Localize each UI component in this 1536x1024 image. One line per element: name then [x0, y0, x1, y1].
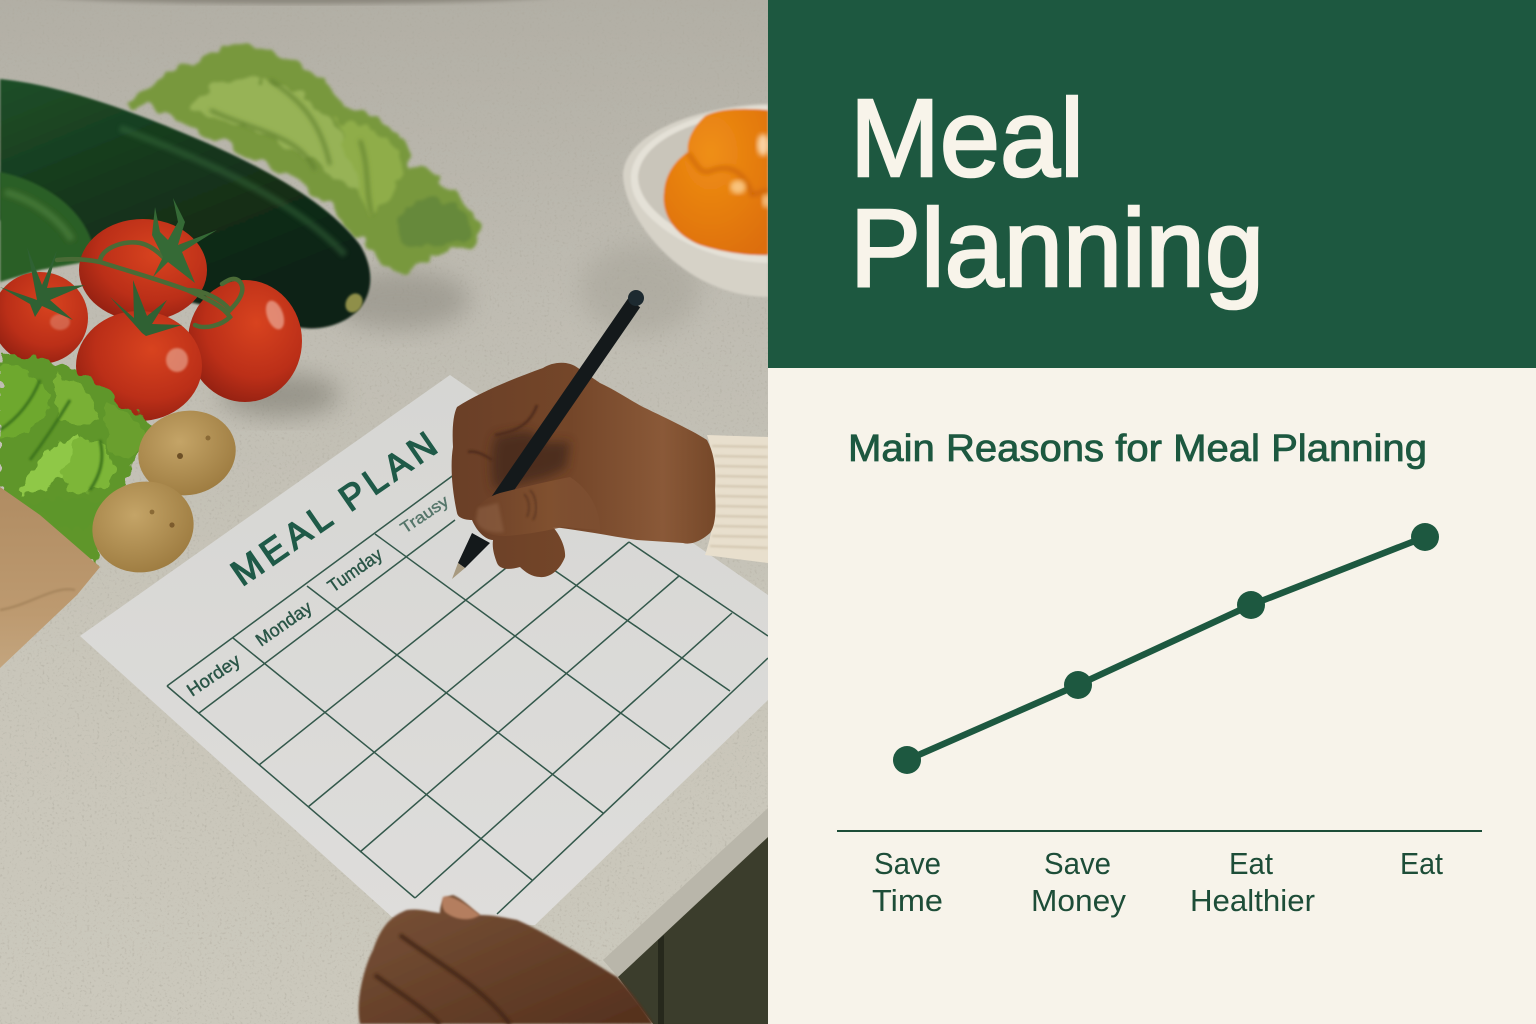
thumb — [473, 477, 600, 536]
day labels: Trausy — [398, 493, 452, 537]
potatoes — [82, 402, 244, 584]
panel: kitchen counter photo illustration — [0, 0, 768, 1024]
panel: text and chart overlay — [837, 77, 1482, 918]
bowl of orange peppers — [623, 104, 770, 297]
axis labels: Eat — [1229, 846, 1273, 881]
panel: green title header — [768, 0, 1536, 368]
axis labels: Time — [872, 883, 943, 918]
axis labels: Healthier — [1190, 883, 1315, 918]
day labels: Monday — [252, 597, 316, 650]
axis labels: Eat — [1400, 846, 1443, 881]
shadow pocket between fingers — [491, 431, 570, 490]
calendar grid — [167, 474, 768, 914]
title: Meal — [850, 77, 1084, 200]
front lettuce — [0, 352, 150, 567]
title: Planning — [850, 187, 1264, 310]
tomato calyx two — [110, 280, 182, 336]
counter front edge and cabinet — [603, 808, 768, 1024]
index finger crease — [468, 405, 537, 460]
vine stems — [57, 242, 242, 327]
day labels: Hordey — [183, 650, 244, 700]
sheet title: MEAL PLAN — [223, 424, 444, 594]
chart axis — [837, 830, 1482, 832]
meal plan sheet — [80, 375, 768, 925]
tomatoes on the vine — [0, 198, 302, 421]
large cucumber — [0, 79, 370, 328]
countertop surface — [0, 0, 768, 1024]
paper bag — [0, 487, 100, 668]
lower hand holding sheet — [359, 895, 653, 1024]
title — [850, 77, 1264, 310]
small cucumber — [0, 172, 92, 282]
chart heading: Main Reasons for Meal Planning — [848, 428, 1427, 470]
line chart — [893, 523, 1439, 774]
panel: cream chart section — [768, 368, 1536, 1024]
writing hand — [452, 363, 715, 577]
pen — [452, 290, 644, 579]
tomato calyx three — [152, 198, 217, 283]
day labels: Tumday — [324, 544, 386, 596]
axis labels: Save — [1044, 846, 1111, 881]
day labels — [183, 493, 452, 700]
tomato calyx one — [0, 247, 85, 320]
axis labels: Save — [874, 846, 941, 881]
sweater cuff — [705, 435, 768, 563]
axis labels: Money — [1031, 883, 1127, 918]
back lettuce — [130, 44, 480, 270]
axis labels — [872, 846, 1443, 918]
